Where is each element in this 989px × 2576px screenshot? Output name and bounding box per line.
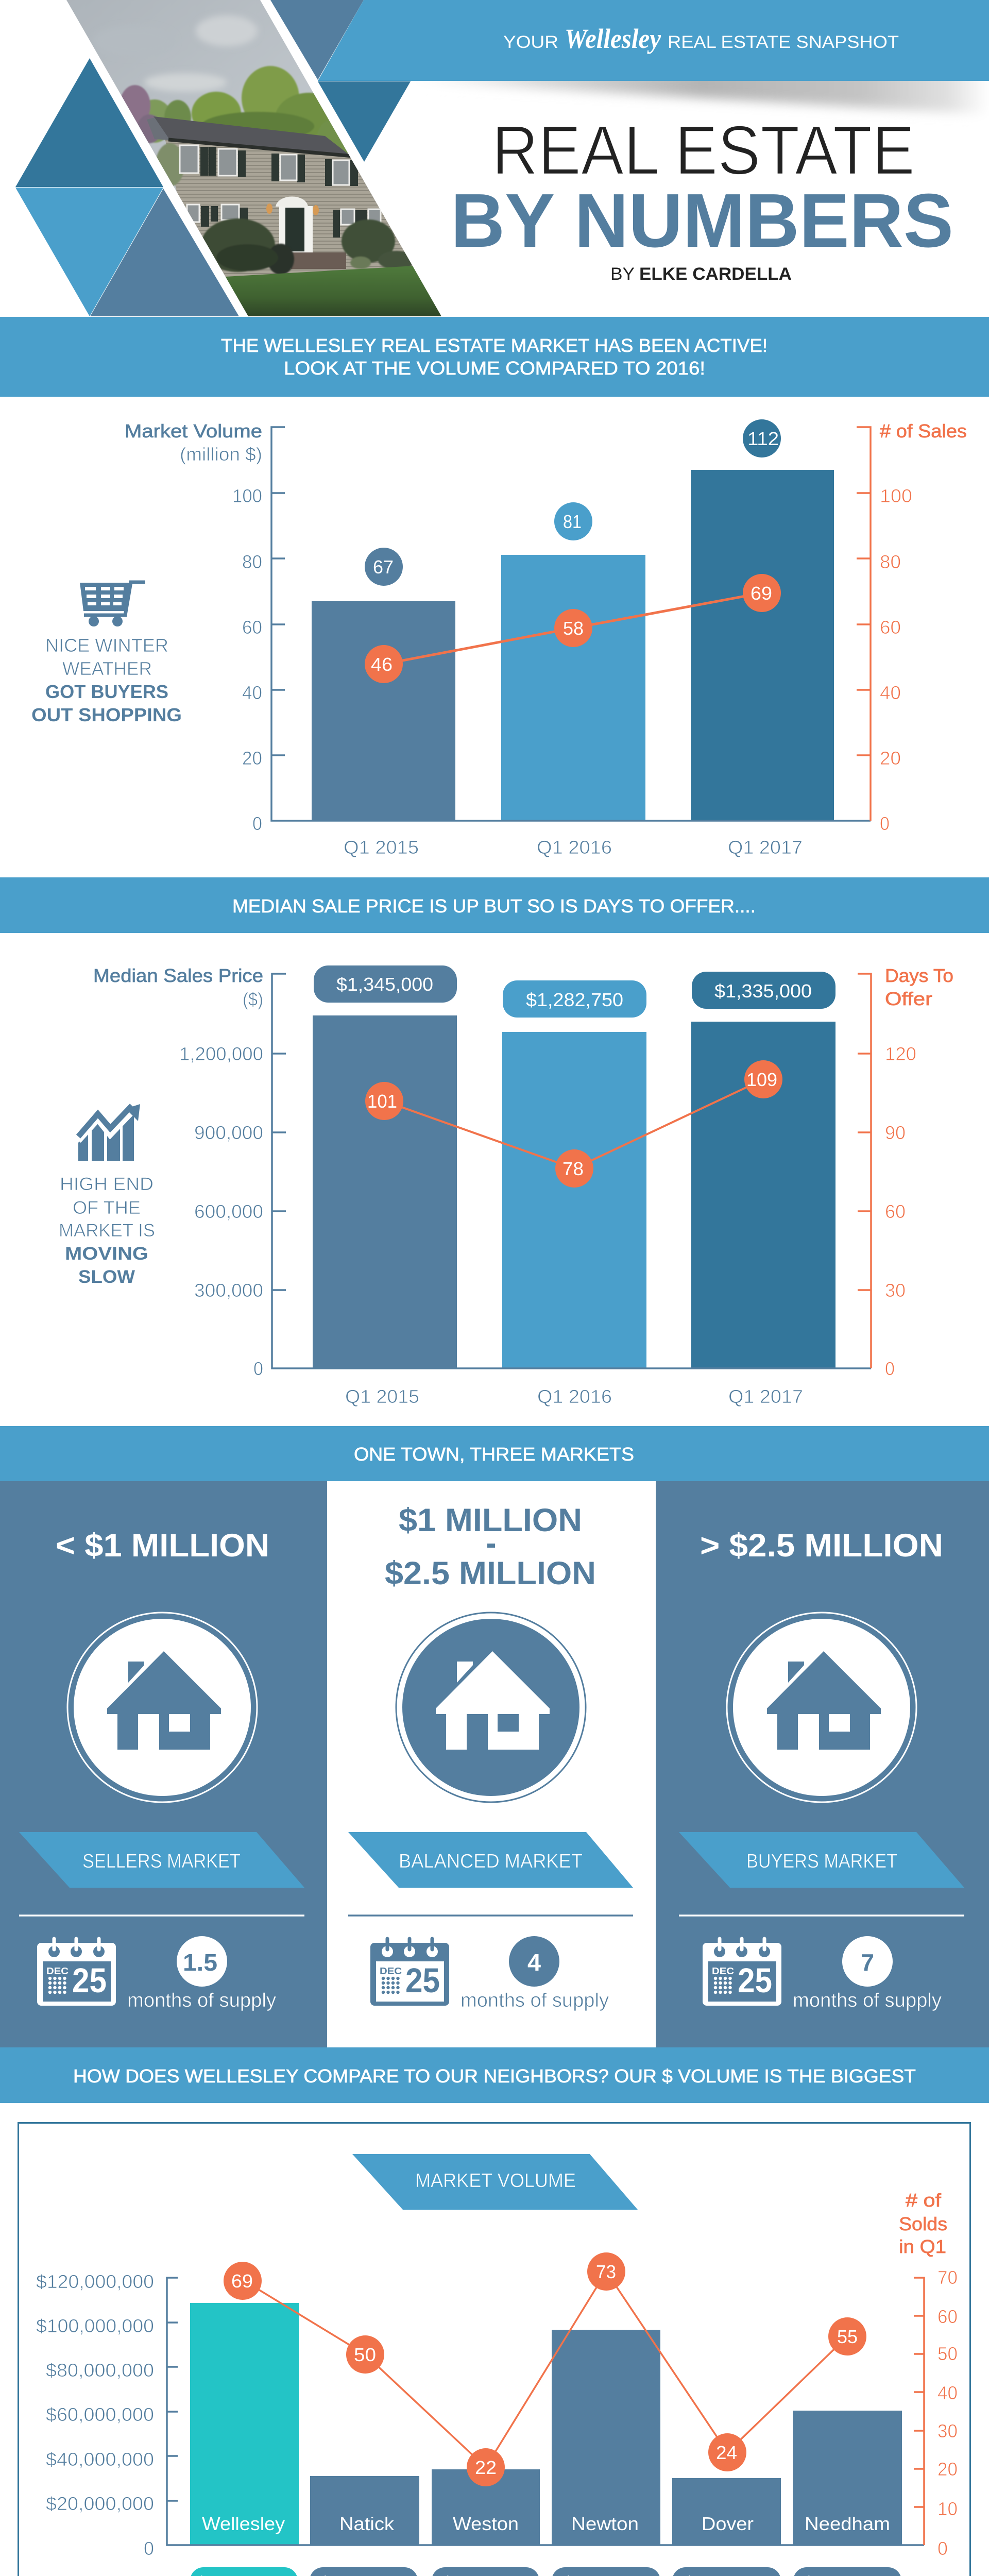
bar town labels: Dover: [702, 2513, 754, 2534]
heading: $1 MILLION: [399, 1502, 582, 1538]
panel: under 1 million: [0, 1481, 327, 2047]
bar town labels: [202, 2513, 890, 2534]
bar town labels: Needham: [805, 2513, 890, 2534]
badge: months of supply: 1.5: [183, 1949, 217, 1976]
right axis: [899, 2190, 958, 2559]
badge: months of supply: months of supply: [793, 1990, 942, 2011]
icon: house in circle: [67, 1613, 257, 1802]
right axis: 30: [885, 1280, 906, 1301]
right axis: # of: [906, 2190, 942, 2211]
section band: market active: LOOK AT THE VOLUME COMPARED TO 2016!: [284, 358, 705, 379]
right axis: 50: [937, 2343, 958, 2364]
panel: market volume chart: [31, 419, 967, 858]
right axis: 30: [937, 2420, 958, 2442]
price pills: [314, 965, 835, 1018]
price pills: $1,335,000: [714, 980, 812, 1002]
right axis: 0: [880, 813, 890, 834]
right axis: 80: [880, 551, 901, 572]
header shadow: [451, 81, 978, 115]
byline: BY: [610, 264, 635, 284]
left axis: $40,000,000: [46, 2449, 154, 2470]
solds line: [224, 2252, 866, 2486]
bars: [312, 470, 834, 821]
section band: median sale price: [0, 877, 989, 933]
callout: nice winter weather: WEATHER: [62, 658, 152, 679]
callout: high end moving slow: MARKET IS: [59, 1221, 155, 1241]
left axis: 900,000: [194, 1122, 263, 1143]
left axis: Market Volume: [125, 420, 262, 442]
icon: shopping cart: [80, 582, 145, 626]
heading: > $2.5 MILLION: [700, 1528, 943, 1564]
left axis: $100,000,000: [36, 2315, 154, 2336]
right axis: 0: [937, 2538, 948, 2559]
left axis: [93, 965, 871, 1379]
left axis: 600,000: [194, 1201, 263, 1222]
bars: [313, 1015, 835, 1368]
title: [451, 111, 953, 263]
left axis: Median Sales Price: [93, 965, 263, 986]
left axis: [36, 2271, 924, 2559]
section band: compare neighbors: [0, 2047, 989, 2103]
left axis: 60: [242, 617, 262, 638]
heading: < $1 MILLION: [56, 1528, 269, 1564]
x labels: Q1 2017: [728, 837, 803, 858]
left axis: 0: [252, 813, 262, 834]
callout: high end moving slow: MOVING: [65, 1244, 148, 1264]
volume value badges: 67: [373, 556, 394, 578]
right axis: # of Sales: [880, 420, 967, 442]
steps: [291, 252, 346, 269]
bar town labels: Weston: [453, 2513, 519, 2534]
left axis: $120,000,000: [36, 2271, 154, 2292]
icon: house in circle: [727, 1613, 916, 1802]
icon: calendar: DEC: [712, 1966, 734, 1976]
ribbon: market volume: MARKET VOLUME: [415, 2170, 576, 2192]
sales line: 58: [563, 618, 584, 639]
right axis: 40: [937, 2382, 958, 2403]
right axis: 60: [880, 617, 901, 638]
icon: calendar: [370, 1939, 449, 2006]
panel: over 2.5 million: [656, 1481, 989, 2047]
x labels: Q1 2015: [345, 1386, 419, 1407]
right axis: [857, 420, 967, 834]
callout: nice winter weather: NICE WINTER: [45, 635, 168, 656]
right axis: 70: [937, 2267, 958, 2288]
callout: high end moving slow: [59, 1174, 155, 1287]
title: REAL ESTATE: [492, 111, 915, 189]
callout: high end moving slow: SLOW: [78, 1267, 135, 1287]
x labels: [345, 1386, 803, 1407]
house body: [165, 138, 443, 278]
byline: ELKE CARDELLA: [639, 264, 792, 284]
panel: median price chart: [59, 965, 953, 1407]
ribbon: sellers market: SELLERS MARKET: [82, 1851, 241, 1872]
photo of colonial house: [62, 0, 453, 319]
callout: nice winter weather: OUT SHOPPING: [31, 704, 182, 725]
right axis: 0: [885, 1358, 895, 1379]
ribbon: market volume: [352, 2154, 638, 2210]
callout: high end moving slow: OF THE: [73, 1198, 141, 1218]
ribbon: balanced market: BALANCED MARKET: [399, 1851, 583, 1872]
lawn: [226, 266, 441, 316]
volume value badges: 81: [563, 511, 582, 532]
icon: calendar: DEC: [46, 1966, 69, 1976]
heading: $2.5 MILLION: [385, 1555, 596, 1591]
left axis: 100: [232, 485, 262, 506]
left axis: $80,000,000: [46, 2360, 154, 2381]
panel: 1 to 2.5 million: [327, 1481, 656, 2047]
right axis: 60: [937, 2306, 958, 2327]
badge: months of supply: 7: [861, 1949, 874, 1976]
x labels: Q1 2017: [728, 1386, 803, 1407]
left axis: 300,000: [194, 1280, 263, 1301]
days line: 78: [562, 1158, 584, 1179]
top band text: Wellesley: [565, 23, 661, 54]
icon: rising chart: [77, 1104, 140, 1161]
x labels: Q1 2015: [344, 837, 419, 858]
right axis: 120: [885, 1043, 916, 1064]
section band: market active: [0, 317, 989, 397]
top band text: REAL ESTATE SNAPSHOT: [668, 32, 899, 52]
callout: high end moving slow: HIGH END: [60, 1174, 154, 1194]
left axis: 0: [253, 1358, 263, 1379]
section band: median sale price: MEDIAN SALE PRICE IS UP BUT SO IS DAYS TO OFFER....: [232, 895, 756, 917]
left axis: $20,000,000: [46, 2493, 154, 2514]
x labels: Q1 2016: [537, 837, 612, 858]
solds line: 22: [475, 2457, 497, 2478]
ribbon: balanced market: [348, 1832, 633, 1888]
heading: [385, 1502, 596, 1591]
bars: [190, 2303, 902, 2545]
panel: neighbors chart: [19, 2123, 970, 2576]
solds line: 73: [596, 2261, 616, 2282]
x labels: [344, 837, 803, 858]
ribbon: buyers market: [679, 1832, 964, 1888]
icon: calendar: DEC: [380, 1966, 402, 1976]
solds line: 50: [354, 2344, 376, 2365]
solds line: 55: [837, 2326, 858, 2347]
solds line: 69: [231, 2270, 253, 2292]
badge: months of supply: [793, 1936, 942, 2011]
badge: months of supply: months of supply: [461, 1990, 609, 2011]
left axis: 40: [242, 682, 262, 703]
days line: 101: [367, 1091, 397, 1112]
badge: months of supply: [461, 1936, 609, 2011]
icon: calendar: [37, 1939, 116, 2006]
top band text: [503, 23, 899, 54]
left axis: 20: [242, 748, 262, 769]
sales line: 69: [751, 583, 772, 604]
badge: months of supply: 4: [527, 1949, 541, 1976]
icon: calendar: 25: [72, 1961, 107, 2000]
right axis: 100: [880, 485, 912, 506]
sales line: 46: [371, 654, 393, 675]
left axis: [125, 420, 871, 834]
right axis: Solds: [899, 2213, 947, 2234]
callout: nice winter weather: [31, 635, 182, 725]
volume value badges: [365, 419, 781, 586]
section band: one town three markets: [0, 1426, 989, 1481]
right axis: in Q1: [899, 2236, 946, 2257]
icon: house in circle: [396, 1613, 586, 1802]
right axis: [858, 965, 953, 1379]
top band text: YOUR: [503, 32, 558, 52]
left axis: 0: [144, 2538, 154, 2559]
price pills: $1,282,750: [526, 989, 623, 1010]
door and portico: [279, 206, 313, 252]
bar town labels: Wellesley: [202, 2513, 285, 2534]
callout: nice winter weather: GOT BUYERS: [45, 681, 168, 702]
right axis: 90: [885, 1122, 906, 1143]
right axis: 40: [880, 682, 901, 703]
right axis: 60: [885, 1201, 906, 1222]
left axis: $60,000,000: [46, 2404, 154, 2425]
left axis: 80: [242, 551, 262, 572]
right axis: 20: [880, 748, 901, 769]
top band: [318, 0, 989, 81]
section band: market active: THE WELLESLEY REAL ESTATE MARKET HAS BEEN ACTIVE!: [221, 335, 768, 356]
icon: calendar: 25: [405, 1961, 440, 2000]
bushes: [201, 218, 415, 275]
x labels: Q1 2016: [537, 1386, 612, 1407]
right axis: 10: [937, 2498, 958, 2519]
icon: calendar: [703, 1939, 781, 2006]
left axis: (million $): [180, 444, 262, 465]
geometric triangles left: [15, 0, 411, 316]
trees: [120, 66, 353, 160]
upper windows: [200, 147, 367, 238]
title: BY NUMBERS: [451, 178, 953, 263]
days line: 109: [746, 1069, 777, 1090]
ribbon: sellers market: [19, 1832, 304, 1888]
header: [15, 0, 989, 319]
volume value badges: 112: [747, 428, 779, 449]
badge: months of supply: months of supply: [127, 1990, 276, 2011]
badge: months of supply: [127, 1936, 276, 2011]
solds line: 24: [716, 2442, 737, 2463]
section band: compare neighbors: HOW DOES WELLESLEY COMPARE TO OUR NEIGHBORS? OUR $ VOLUME IS THE BIGGEST: [73, 2065, 916, 2087]
right axis: Offer: [885, 988, 932, 1009]
icon: calendar: 25: [738, 1961, 772, 2000]
sales line: [365, 574, 781, 683]
ribbon: buyers market: BUYERS MARKET: [746, 1851, 897, 1872]
bar town labels: Natick: [339, 2513, 395, 2534]
volume pills: [190, 2567, 901, 2576]
bar town labels: Newton: [571, 2513, 639, 2534]
left axis: ($): [243, 989, 263, 1010]
right axis: Days To: [885, 965, 953, 986]
price pills: $1,345,000: [336, 974, 433, 995]
section band: one town three markets: ONE TOWN, THREE MARKETS: [354, 1444, 634, 1465]
left axis: 1,200,000: [179, 1043, 263, 1064]
days line: [365, 1060, 782, 1188]
right axis: 20: [937, 2459, 958, 2480]
